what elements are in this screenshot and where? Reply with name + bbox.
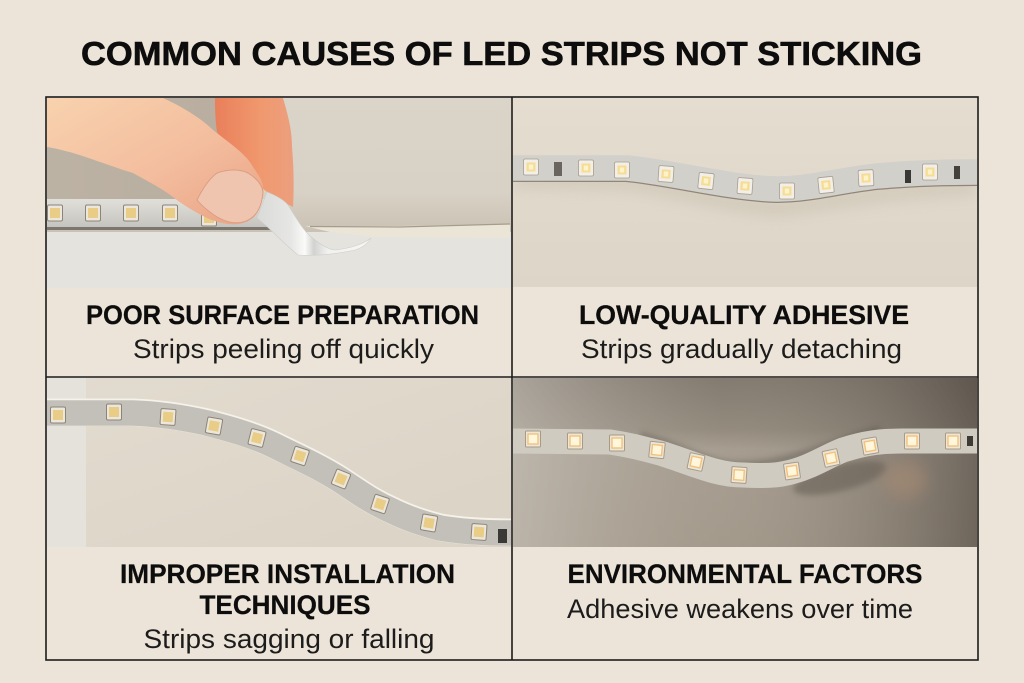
heading: IMPROPER INSTALLATION bbox=[120, 559, 455, 589]
description: Strips sagging or falling bbox=[144, 624, 434, 654]
photo: finger peeling strip off the wall bbox=[47, 98, 511, 256]
panel: environmental factors bbox=[513, 378, 977, 624]
photo: strip sagging across wall bbox=[47, 378, 511, 547]
description: Adhesive weakens over time bbox=[567, 594, 913, 624]
panel: low-quality adhesive bbox=[513, 98, 977, 364]
photo: strip on damp, stained wall bbox=[513, 378, 977, 547]
heading: POOR SURFACE PREPARATION bbox=[86, 300, 479, 330]
panel: improper installation techniques bbox=[47, 378, 511, 654]
photo: strip gradually detaching from wall bbox=[513, 98, 977, 287]
heading: TECHNIQUES bbox=[200, 590, 370, 620]
grid frame bbox=[46, 97, 978, 660]
description: Strips peeling off quickly bbox=[133, 334, 435, 364]
title: COMMON CAUSES OF LED STRIPS NOT STICKING bbox=[81, 35, 922, 72]
heading: LOW-QUALITY ADHESIVE bbox=[579, 300, 909, 330]
heading bbox=[120, 559, 455, 620]
heading: ENVIRONMENTAL FACTORS bbox=[568, 559, 922, 589]
finger bbox=[215, 98, 294, 207]
panel: poor surface preparation bbox=[47, 98, 511, 364]
thumb bbox=[47, 98, 263, 224]
description: Strips gradually detaching bbox=[581, 334, 902, 364]
